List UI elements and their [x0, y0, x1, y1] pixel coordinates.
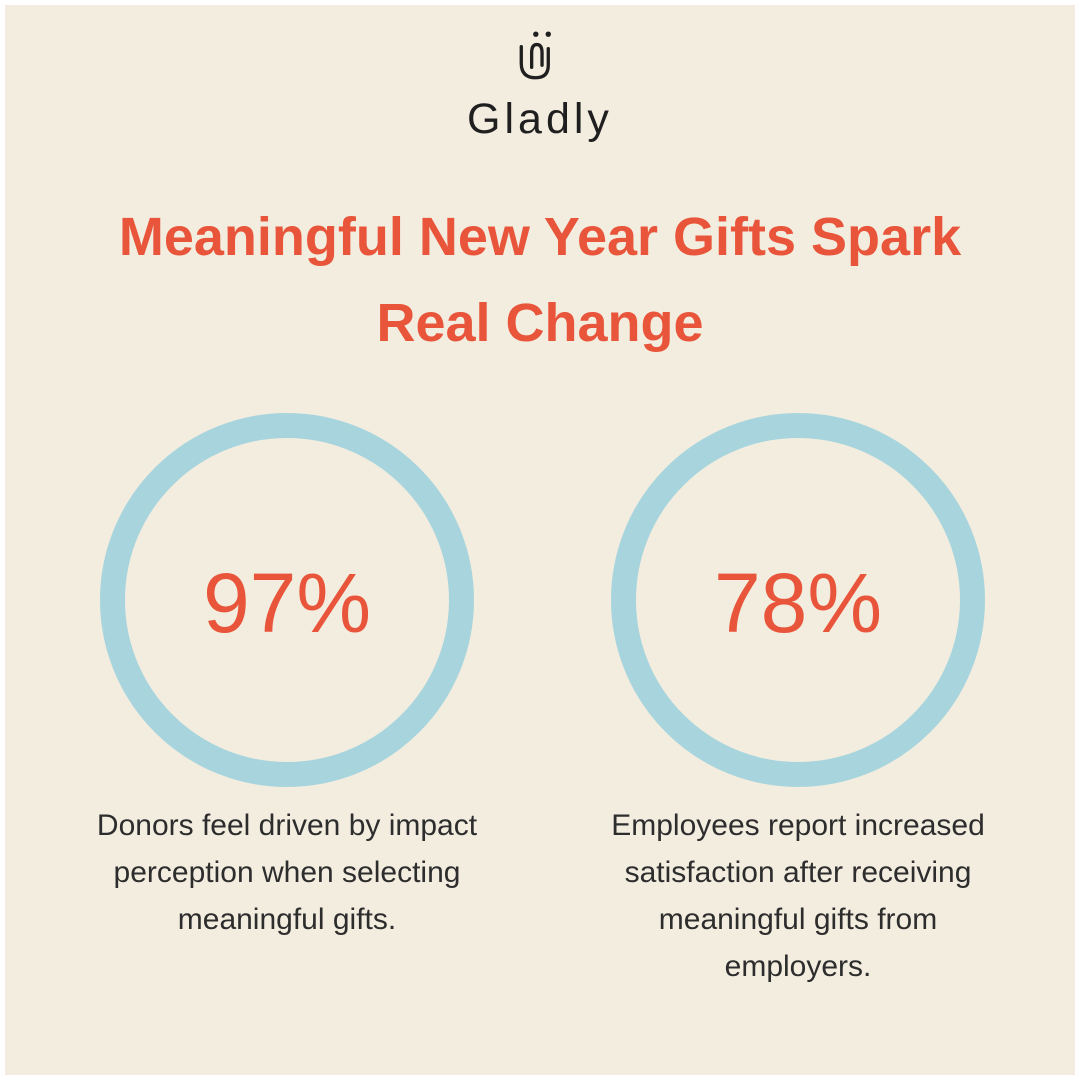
- ring: [100, 413, 474, 787]
- title: Meaningful New Year Gifts Spark: [119, 207, 961, 267]
- number: 97%: [203, 556, 371, 650]
- number: 78%: [714, 556, 882, 650]
- caption: donors: Donors feel driven by impact perception when selecting meaningful gifts.: [97, 809, 477, 936]
- caption: employees: Employees report increased satisfaction after receiving meaningful gifts from employers.: [611, 809, 985, 983]
- logo: [467, 32, 613, 143]
- logo wordmark: Gladly: [467, 95, 613, 143]
- title: [119, 207, 962, 353]
- ring: [611, 413, 985, 787]
- icon: logo mark: [520, 32, 551, 80]
- stat: 97%: [100, 413, 474, 787]
- title: Real Change: [376, 293, 704, 353]
- stat: 78%: [611, 413, 985, 787]
